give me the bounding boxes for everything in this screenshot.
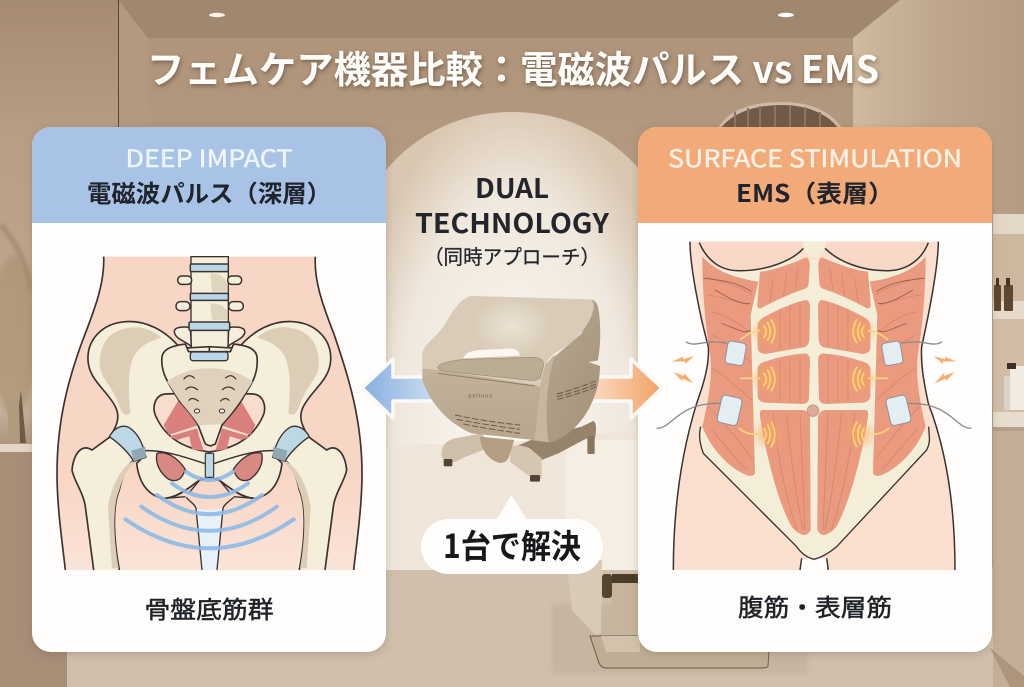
- navel: [807, 405, 819, 416]
- callout pointer: [495, 495, 528, 522]
- background: right wall: [853, 0, 1024, 687]
- header japanese label: EMS（表層）: [736, 174, 894, 209]
- arrow: to deep panel: [362, 359, 440, 418]
- body silhouette: [57, 257, 362, 570]
- label line three: （同時アプローチ）: [424, 241, 600, 270]
- panel background: [32, 127, 386, 652]
- arrow: to surface panel: [590, 359, 662, 418]
- chair handle gap: [463, 348, 520, 358]
- pulse waves: [125, 472, 294, 548]
- panel header: [638, 127, 992, 223]
- pelvis bones: [72, 321, 209, 570]
- header japanese label: 電磁波パルス（深層）: [87, 174, 331, 209]
- panel background: [638, 127, 992, 652]
- body silhouette: [673, 242, 955, 570]
- callout text: 1台で解決: [443, 520, 581, 568]
- body outline: [673, 242, 955, 570]
- label line two: TECHNOLOGY: [415, 202, 609, 241]
- chest center gap: [803, 242, 826, 257]
- panel caption: 腹筋・表層筋: [738, 588, 892, 623]
- central cream area: [700, 260, 929, 559]
- lightning marks: [672, 356, 694, 383]
- panel header: [32, 127, 386, 223]
- background: daybed: [386, 430, 808, 674]
- pubic symphysis: [205, 453, 214, 477]
- header english label: SURFACE STIMULATION: [668, 139, 962, 174]
- chest: [699, 242, 928, 271]
- chair brand: pelluna: [468, 393, 493, 400]
- chair front panel: [422, 369, 540, 440]
- panel: EMS: [638, 127, 992, 652]
- callout: single device: [421, 495, 603, 574]
- chair seat: [438, 357, 543, 381]
- pelvis bones mirrored: [209, 321, 347, 570]
- muscles half: [657, 257, 811, 535]
- stimulation glow: [750, 315, 787, 348]
- background: left shelf and plant: [0, 225, 67, 687]
- label line one: DUAL: [475, 167, 549, 206]
- electrode pads: [686, 342, 727, 344]
- header english label: DEEP IMPACT: [126, 139, 292, 174]
- chair right shell: [533, 299, 600, 443]
- panel caption: 骨盤底筋群: [144, 590, 274, 625]
- chair seat edge: [438, 373, 535, 386]
- background: floor: [67, 567, 1002, 687]
- callout pill: [421, 519, 603, 574]
- icon: ceiling light: [209, 13, 225, 17]
- icon: ceiling light: [778, 13, 794, 17]
- chair inner back and left arm: [422, 296, 594, 387]
- illustration: abdominal muscles: [657, 242, 971, 570]
- background: window arch with curtains: [718, 102, 842, 128]
- chest outline: [699, 243, 928, 271]
- pelvic floor muscles: [164, 400, 255, 451]
- lower central column: [165, 477, 254, 570]
- sacrum: [162, 344, 257, 446]
- chair arm front: [534, 354, 555, 442]
- dual technology label: [415, 167, 609, 270]
- muscles mirrored: [817, 257, 971, 535]
- panel: electromagnetic pulse: [32, 127, 386, 652]
- title: フェムケア機器比較：電磁波パルス vs EMS: [147, 39, 879, 94]
- background: left wall: [0, 0, 118, 687]
- icon: dual technology chair: [422, 296, 600, 482]
- background: glowing central alcove: [386, 112, 640, 660]
- background: right shelves with bottles: [990, 214, 1024, 687]
- illustration: pelvic floor anatomy: [57, 257, 362, 570]
- spine: [174, 257, 245, 353]
- chair back highlight: [472, 297, 552, 357]
- chair vents: [455, 380, 598, 433]
- background: ceiling: [110, 0, 900, 38]
- body outline: [57, 257, 362, 570]
- chair base: [442, 421, 596, 482]
- pelvic cavity: [154, 393, 265, 452]
- cream area outline: [700, 427, 929, 559]
